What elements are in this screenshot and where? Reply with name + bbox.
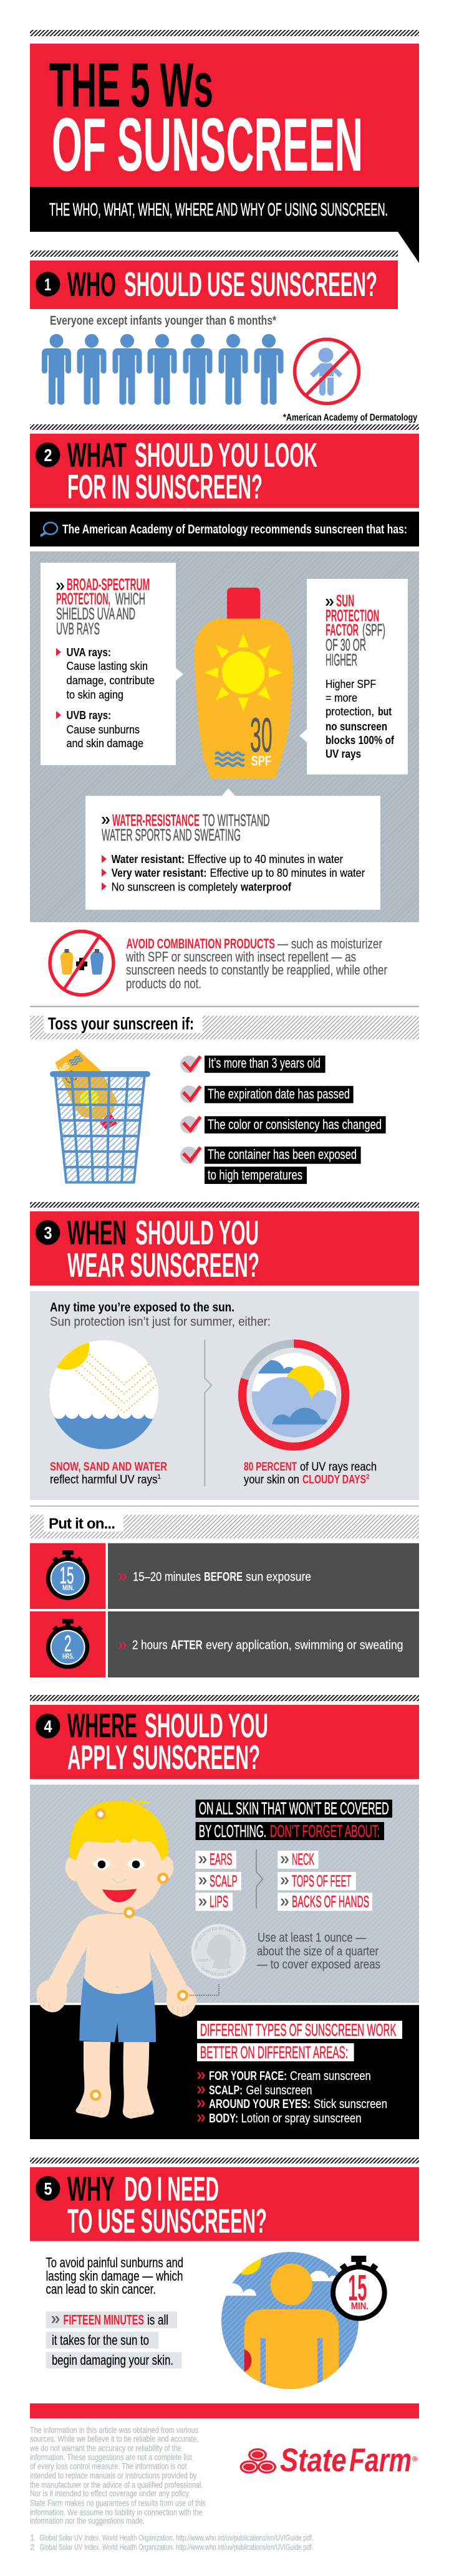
eyes <box>92 1858 145 1870</box>
heading: section 2 what: WHAT <box>67 436 127 474</box>
list: sunscreen types: Stick sunscreen <box>314 2097 387 2111</box>
heading: section 5 why <box>30 2167 419 2241</box>
callout: broad-spectrum: UVB RAYS <box>56 619 100 638</box>
caption: cloudy days: of UV rays reach <box>300 1461 377 1474</box>
caption: cloudy days: CLOUDY DAYS <box>302 1474 366 1487</box>
caption: snow sand water: 1 <box>157 1474 161 1481</box>
item: expiration date: The expiration date has passed <box>208 1086 350 1102</box>
legal text: information. These suggestions are not a complete list <box>30 2452 192 2462</box>
list: sunscreen types: BODY: <box>209 2112 238 2125</box>
icon: wastebasket with bottle: SPF <box>56 1061 71 1075</box>
icon: sunscreen bottle: SPF <box>251 753 271 768</box>
nose <box>112 1879 126 1883</box>
callout: water-resistance: WATER-RESISTANCE <box>112 811 200 830</box>
icon: stopwatch 15 min: 15 <box>60 1563 74 1589</box>
callout: sun protection factor: FACTOR <box>326 621 359 639</box>
icon: quarter coin: UNITED STATES OF AMERICA <box>195 1927 241 1950</box>
callout: water-resistance: No sunscreen is completely <box>112 881 238 894</box>
icon: stopwatch 2 hrs: 2 <box>64 1631 71 1656</box>
text: one ounce: about the size of a quarter <box>257 1945 379 1958</box>
legal text: The information in this article was obtained from various <box>30 2425 198 2435</box>
list: sunscreen types: Cream sunscreen <box>290 2069 371 2083</box>
caption: snow sand water: reflect harmful UV rays <box>50 1474 157 1487</box>
callout: broad-spectrum: PROTECTION, <box>56 589 110 608</box>
markers <box>91 1810 187 2099</box>
icon: sunscreen bottle <box>195 588 292 779</box>
list: sunscreen types: SCALP: <box>209 2084 243 2097</box>
heading: section 4 where: 4 <box>44 1717 52 1736</box>
illustration: child <box>36 1796 219 2119</box>
body <box>36 1914 197 2017</box>
heading: section 2 what: FOR IN SUNSCREEN? <box>67 467 263 506</box>
footnotes: Global Solar UV Index. World Health Organization. http://www.who.int/uv/publications/en/UVIGuide.pdf. <box>39 2533 313 2542</box>
legal text: information nor the suggestions made. <box>30 2516 145 2526</box>
icon: magnifier <box>41 522 57 536</box>
callout: broad-spectrum: UVA rays: <box>66 646 111 659</box>
tag list: neck feet hands: TOPS OF FEET <box>292 1872 351 1891</box>
tags: fifteen minutes: begin damaging your skin. <box>52 2352 173 2368</box>
callout: broad-spectrum: damage, contribute <box>66 674 155 687</box>
heading: put it on: Put it on... <box>49 1515 115 1532</box>
icons: seven adults <box>42 334 283 405</box>
text: to avoid sunburns: To avoid painful sunburns and <box>46 2255 183 2271</box>
heading: section 1 who: 1 <box>44 275 51 294</box>
row: 15 minutes before: BEFORE <box>204 1570 243 1584</box>
heading: section 3 when: WEAR SUNSCREEN? <box>67 1246 259 1284</box>
heading: section 2 what <box>30 434 419 508</box>
tag list: neck feet hands: BACKS OF HANDS <box>292 1892 369 1911</box>
heading: section 5 why: DO I NEED <box>124 2170 219 2208</box>
callout: sun protection factor: SUN <box>336 591 354 610</box>
footer bar <box>30 2403 419 2418</box>
item: more than 3 years <box>180 1055 326 1073</box>
tags: dont forget: BY CLOTHING. <box>199 1821 266 1841</box>
row: 2 hours after: every application, swimming or sweating <box>206 1639 403 1653</box>
legal text: intended to replace manuals or instructions provided by <box>30 2470 197 2480</box>
footnotes: Global Solar UV Index. World Health Organization. http://www.who.int/uv/publications/en/UVIGuide.pdf. <box>39 2542 313 2552</box>
icon: stopwatch 15 min: MIN. <box>62 1583 74 1592</box>
item: high temperatures: to high temperatures <box>208 1167 302 1183</box>
tag list: neck feet hands <box>278 1849 372 1911</box>
heading: section 4 where: APPLY SUNSCREEN? <box>67 1738 260 1777</box>
tag list: ears scalp lips <box>196 1849 241 1911</box>
callout: water-resistance: Effective up to 80 minutes in water <box>210 867 365 879</box>
icon: quarter coin: QUARTER DOLLAR <box>201 1966 232 1976</box>
callout: broad-spectrum: Cause sunburns <box>66 723 140 736</box>
icon: stopwatch 15 min: MIN. <box>351 2301 369 2312</box>
heading: section 5 why: WHY <box>67 2170 115 2208</box>
footnotes: 2 <box>30 2542 34 2552</box>
text: avoid combination products: with SPF or sunscreen with insect repellent — as <box>125 949 356 965</box>
stripe <box>30 1695 419 1701</box>
icon: stopwatch 15 min: 15 <box>348 2268 367 2309</box>
heading: section 5 why: 5 <box>44 2179 52 2198</box>
callout: sun protection factor: PROTECTION <box>326 606 379 625</box>
tags: different types <box>197 2020 402 2062</box>
callout: broad-spectrum: UVB rays: <box>66 709 111 722</box>
divider with chevron <box>256 1849 263 1908</box>
panel: recommendations <box>30 551 419 922</box>
icon: no infants sign <box>294 339 359 404</box>
text: avoid combination products: products do not. <box>126 976 201 991</box>
item: high temperatures <box>180 1147 361 1184</box>
heading: toss your sunscreen <box>30 1014 419 1039</box>
heading: section 2 what: 2 <box>44 446 52 465</box>
shorts <box>79 1977 156 2042</box>
text: to avoid sunburns: can lead to skin cancer. <box>46 2281 156 2297</box>
text: avoid combination products <box>125 936 387 991</box>
callout: water-resistance <box>85 788 380 910</box>
divider with chevron <box>205 1340 211 1486</box>
callout: broad-spectrum: WHICH <box>115 589 145 608</box>
sun on bottle <box>205 634 282 712</box>
footnotes <box>30 2533 313 2552</box>
logo: State Farm <box>239 2442 417 2479</box>
heading: toss your sunscreen: Toss your sunscreen if: <box>48 1014 194 1033</box>
row: 15 minutes before: sun exposure <box>246 1570 311 1584</box>
callout: water-resistance: TO WITHSTAND <box>203 811 269 830</box>
heading: section 5 why: TO USE SUNSCREEN? <box>67 2202 267 2240</box>
heading: section 4 where: SHOULD YOU <box>145 1706 268 1745</box>
text: avoid combination products: — such as moisturizer <box>278 936 382 952</box>
icon: quarter coin: LIBERTY <box>196 1959 211 1963</box>
tag list: ears scalp lips: LIPS <box>210 1892 228 1911</box>
stripe <box>30 2157 419 2163</box>
stripe <box>30 1202 419 1208</box>
text: avoid combination products: AVOID COMBINATION PRODUCTS <box>126 936 275 952</box>
callout: broad-spectrum: to skin aging <box>66 689 123 701</box>
caption: cloudy days: your skin on <box>244 1474 299 1487</box>
heading: section 4 where: WHERE <box>67 1706 137 1745</box>
row: 15 minutes before: 15–20 minutes <box>133 1570 201 1584</box>
heading: section 3 when <box>30 1211 419 1286</box>
panel: when <box>30 1291 419 1500</box>
callout: sun protection factor: blocks 100% of <box>326 734 395 747</box>
item: more than 3 years: It’s more than 3 years old <box>208 1055 321 1071</box>
caption: cloudy days <box>244 1461 377 1487</box>
callout: sun protection factor <box>299 579 408 775</box>
top stripe <box>30 30 419 36</box>
item: high temperatures: The container has been exposed <box>208 1147 357 1162</box>
text: everyone except infants: Everyone except infants younger than 6 months* <box>50 314 276 328</box>
legal text: sources. While we believe it to be reliable and accurate, <box>30 2434 199 2444</box>
panel: when: Any time you’re exposed to the sun. <box>50 1301 234 1315</box>
heading: section 4 where <box>30 1705 419 1779</box>
callout: water-resistance: Water resistant: <box>112 853 185 866</box>
reflected rays <box>77 1355 157 1413</box>
callout: broad-spectrum: and skin damage <box>66 737 143 750</box>
panel: when: Sun protection isn’t just for summer, either: <box>50 1315 271 1329</box>
illustration: person in sun <box>221 2252 359 2389</box>
callout: sun protection factor: HIGHER <box>326 651 357 669</box>
icon: stopwatch 2 hrs <box>46 1619 89 1669</box>
icon: wastebasket with bottle: 30 <box>61 1066 80 1087</box>
item: expiration date <box>180 1085 354 1103</box>
logo: State Farm: State <box>280 2442 347 2479</box>
tag list: ears scalp lips: SCALP <box>210 1872 238 1891</box>
legal text: of every loss control measure. The information is not <box>30 2461 186 2471</box>
callout: sun protection factor: no sunscreen <box>326 720 387 733</box>
text: one ounce: Use at least 1 ounce — <box>258 1931 366 1945</box>
list: sunscreen types: FOR YOUR FACE: <box>209 2069 287 2083</box>
heading: put it on <box>30 1515 419 1538</box>
caption: cloudy days: 2 <box>366 1474 370 1481</box>
footnotes: 1 <box>30 2533 34 2542</box>
logo: State Farm: Farm <box>349 2442 412 2479</box>
icon: stopwatch 2 hrs: HRS. <box>62 1652 74 1661</box>
stripe <box>30 424 419 430</box>
callout: sun protection factor: Higher SPF <box>326 678 376 690</box>
text: one ounce: — to cover exposed areas <box>257 1958 380 1972</box>
text: to avoid sunburns <box>46 2255 183 2297</box>
heading: section 3 when: SHOULD YOU <box>135 1213 259 1252</box>
callout: broad-spectrum: BROAD-SPECTRUM <box>67 575 150 594</box>
illustration: sun reflecting on water <box>49 1340 158 1449</box>
text: one ounce <box>257 1931 380 1972</box>
heading: section 3 when: WHEN <box>67 1213 127 1252</box>
callout: broad-spectrum <box>41 563 183 765</box>
tags: fifteen minutes: it takes for the sun to <box>52 2332 149 2348</box>
row: 15 minutes before <box>30 1543 419 1609</box>
caption: snow sand water: SNOW, SAND AND WATER <box>50 1461 167 1474</box>
chart: 80 percent donut with clouds <box>242 1343 345 1447</box>
callout: broad-spectrum: Cause lasting skin <box>66 660 148 672</box>
mouth <box>102 1889 137 1902</box>
checklist: toss reasons <box>180 1055 386 1184</box>
row: 2 hours after: 2 hours <box>132 1639 168 1653</box>
callout: water-resistance: Effective up to 40 minutes in water <box>188 853 343 866</box>
callout: sun protection factor: = more <box>326 692 357 704</box>
legal text: State Farm makes no guarantees of results from use of this <box>30 2497 206 2507</box>
callout: sun protection factor: but <box>378 705 392 718</box>
legal text <box>29 2425 206 2526</box>
list: sunscreen types: Gel sunscreen <box>246 2084 312 2097</box>
banner: academy recommendation <box>30 512 419 546</box>
icon: stopwatch 15 min <box>331 2256 387 2321</box>
hair <box>70 1796 168 1861</box>
item: color or consistency <box>180 1116 386 1133</box>
tags: fifteen minutes: is all <box>147 2312 168 2328</box>
stripe <box>30 250 398 257</box>
item: color or consistency: The color or consistency has changed <box>208 1117 382 1132</box>
tag list: neck feet hands: NECK <box>292 1849 314 1868</box>
title: THE 5 Ws <box>49 50 213 120</box>
callout: water-resistance: WATER SPORTS AND SWEATING <box>102 826 241 844</box>
list: sunscreen types <box>197 2069 387 2125</box>
legal text: the manufacturer or the advice of a qualified professional. <box>30 2479 203 2489</box>
logo ovals <box>239 2448 276 2474</box>
caption: cloudy days: 80 PERCENT <box>244 1461 297 1474</box>
caption: snow sand water <box>50 1461 167 1487</box>
row: 2 hours after: AFTER <box>171 1639 203 1653</box>
tag list: ears scalp lips: EARS <box>210 1849 232 1868</box>
heading: section 3 when: 3 <box>44 1223 52 1243</box>
panel: title banner <box>30 44 419 263</box>
waves <box>215 753 244 766</box>
head <box>63 1855 85 1882</box>
logo: State Farm: ® <box>412 2456 417 2463</box>
heading: section 1 who: WHO <box>67 265 116 303</box>
row: 2 hours after <box>30 1611 419 1677</box>
icon: quarter coin <box>191 1924 246 1979</box>
callout: broad-spectrum: SHIELDS UVA AND <box>56 604 135 623</box>
callout: sun protection factor: (SPF) <box>362 621 385 639</box>
icon: wastebasket with bottle <box>50 1049 150 1183</box>
callout: water-resistance: waterproof <box>240 881 292 894</box>
legal text: we do not warrant the accuracy or reliability of the <box>29 2443 181 2453</box>
tags: fifteen minutes: FIFTEEN MINUTES <box>64 2312 144 2328</box>
legal text: Nor is it intended to effect coverage under any policy. <box>30 2488 190 2498</box>
callout: water-resistance: Very water resistant: <box>112 867 207 879</box>
callout: sun protection factor: UV rays <box>326 748 361 760</box>
icon: sunscreen bottle: 30 <box>250 707 273 762</box>
tags: dont forget <box>196 1799 392 1841</box>
legal text: information. We assume no liability in connection with the <box>30 2507 203 2517</box>
icon: no combination products <box>50 932 113 995</box>
tags: fifteen minutes <box>46 2311 182 2368</box>
fingers and toes <box>39 1997 188 2117</box>
heading: section 1 who <box>30 260 398 309</box>
list: sunscreen types: AROUND YOUR EYES: <box>209 2097 311 2111</box>
panel: where <box>30 1785 419 2139</box>
callout: sun protection factor: OF 30 OR <box>326 636 366 654</box>
list: sunscreen types: Lotion or spray sunscreen <box>241 2112 362 2125</box>
callout: sun protection factor: protection, <box>326 705 374 718</box>
text: to avoid sunburns: lasting skin damage — which <box>46 2268 183 2284</box>
title <box>49 50 363 187</box>
icon: stopwatch 15 min <box>46 1550 89 1600</box>
